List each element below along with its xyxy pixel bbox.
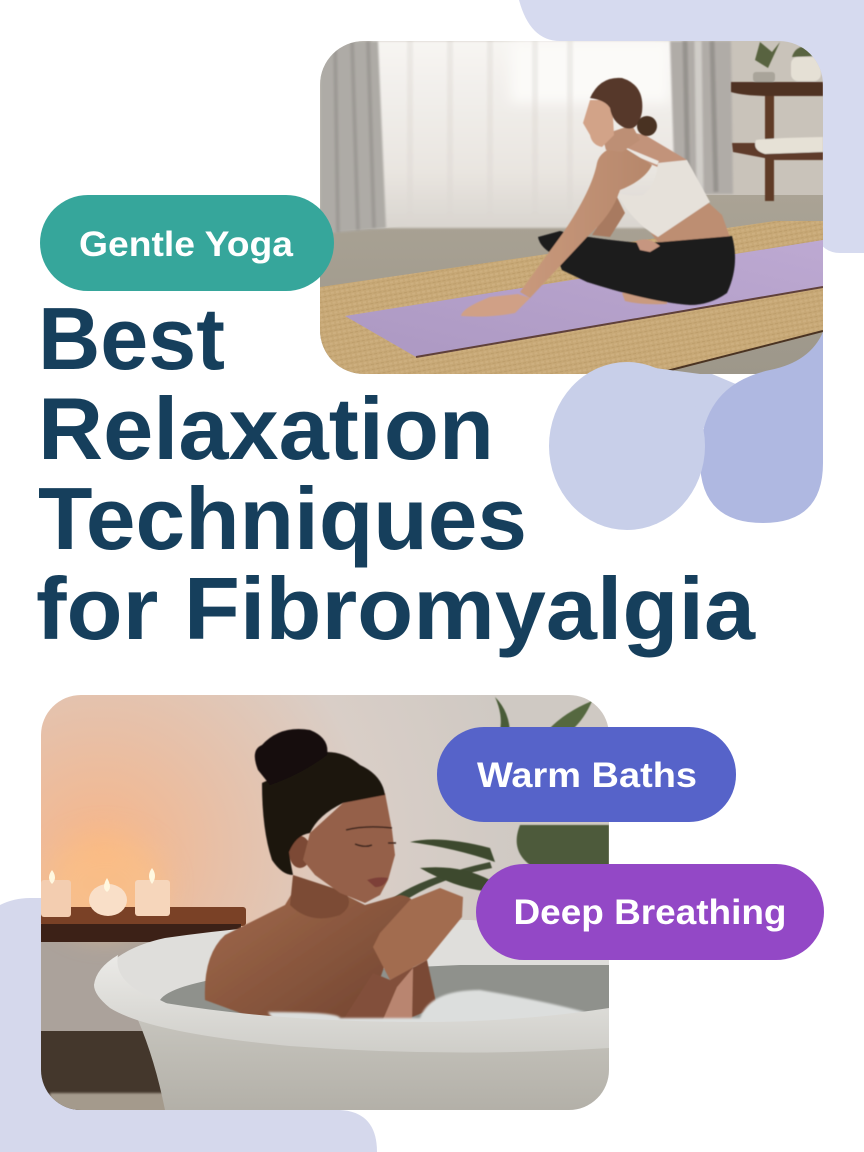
wooden shelf with towel and plant bbox=[731, 42, 823, 201]
forearm bbox=[343, 967, 413, 1022]
label pill: Deep Breathing: Deep Breathing bbox=[514, 893, 786, 932]
title line: Best: Best bbox=[38, 289, 225, 388]
background blob: bottom left bbox=[0, 898, 377, 1152]
woman bbox=[205, 729, 463, 1022]
mat edge bbox=[416, 287, 823, 357]
hair bbox=[590, 78, 642, 129]
lips bbox=[367, 877, 388, 887]
jute rug bbox=[320, 221, 823, 374]
top strap bbox=[626, 148, 660, 166]
far arm bbox=[592, 197, 625, 237]
label pill: Gentle Yoga bbox=[40, 195, 334, 291]
label pill: Deep Breathing bbox=[476, 864, 824, 960]
bathtub front rim bbox=[94, 955, 609, 1053]
foot under leg bbox=[622, 292, 667, 304]
title line: Techniques: Techniques bbox=[38, 469, 527, 568]
houseplant bbox=[385, 697, 609, 908]
inner foot bbox=[636, 239, 660, 252]
warm wall bbox=[41, 695, 609, 928]
title line: Relaxation: Relaxation bbox=[38, 379, 494, 478]
background blob: bridge between circles bbox=[655, 368, 750, 430]
bathtub body bbox=[138, 1020, 609, 1110]
floor bbox=[320, 195, 823, 374]
title bbox=[36, 289, 756, 658]
right drape bbox=[670, 41, 733, 194]
woman in yoga pose bbox=[461, 78, 735, 317]
neck bbox=[604, 127, 637, 151]
yoga mat bbox=[345, 240, 823, 357]
background blob: periwinkle shape bbox=[700, 332, 823, 523]
raised hand bbox=[373, 888, 463, 980]
white crop top bbox=[617, 160, 710, 237]
lower hand bbox=[382, 968, 413, 1022]
far arm bbox=[412, 960, 436, 1018]
lower cabinet bbox=[41, 942, 150, 1031]
bath water bbox=[160, 965, 609, 1020]
arm reaching to the mat bbox=[520, 145, 652, 298]
title line: for Fibromyalgia: for Fibromyalgia bbox=[36, 559, 756, 658]
candles bbox=[41, 868, 170, 917]
bathtub back rim bbox=[117, 920, 609, 1004]
hair bbox=[262, 752, 385, 875]
neck shadow bbox=[290, 875, 349, 918]
background blob: lilac circle bbox=[549, 362, 705, 530]
candle glow bbox=[55, 855, 159, 946]
black leggings bbox=[538, 231, 735, 305]
background blob: top right bbox=[519, 0, 864, 253]
label pill: Gentle Yoga: Gentle Yoga bbox=[79, 225, 294, 264]
left drape bbox=[320, 41, 386, 234]
hair bun bbox=[255, 729, 327, 785]
face bbox=[583, 100, 614, 147]
hand bbox=[461, 294, 530, 317]
bath mat on the floor bbox=[49, 1092, 165, 1110]
rug edge bbox=[667, 330, 823, 370]
photo: woman doing gentle yoga bbox=[320, 41, 823, 374]
hair bun bbox=[637, 116, 657, 136]
label pill: Warm Baths: Warm Baths bbox=[477, 756, 697, 795]
label pill: Warm Baths bbox=[437, 727, 736, 822]
dark floor bbox=[41, 1031, 171, 1111]
waist skin bbox=[651, 203, 730, 243]
sheer curtain bbox=[372, 41, 682, 228]
wooden side table bbox=[41, 907, 246, 942]
ear bbox=[289, 836, 311, 868]
room wall bbox=[320, 41, 823, 231]
back above top bbox=[628, 132, 686, 168]
photo: woman in a warm bath bbox=[41, 695, 609, 1113]
shoulders and chest bbox=[204, 894, 412, 1020]
closed eye and brow bbox=[346, 827, 396, 846]
face bbox=[303, 793, 395, 903]
bath foam bbox=[268, 990, 585, 1030]
